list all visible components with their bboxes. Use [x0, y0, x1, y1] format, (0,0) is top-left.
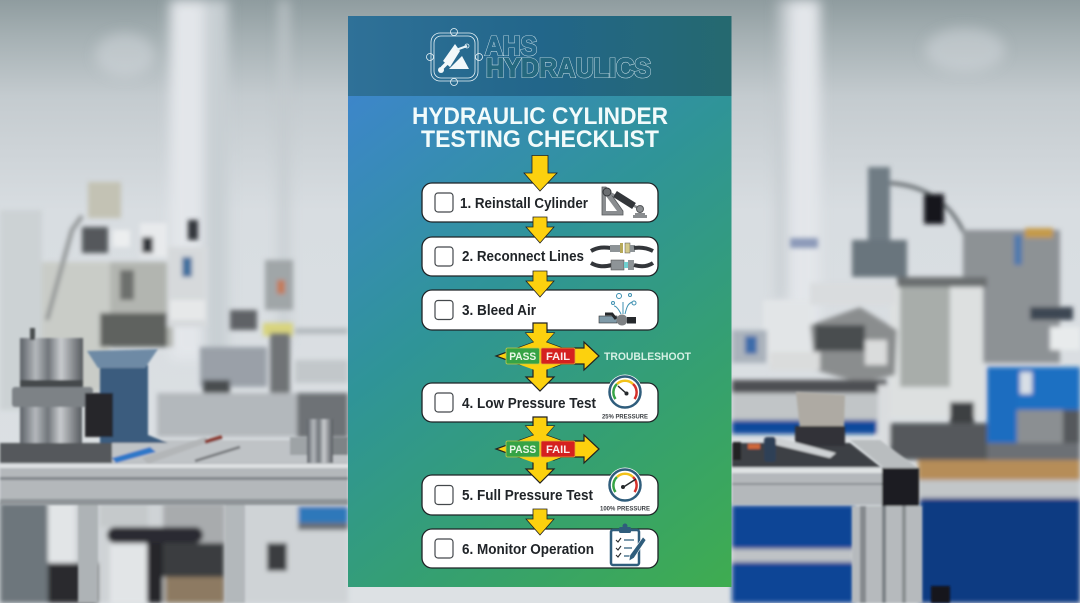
logo wordmark: AHS	[485, 31, 537, 61]
icon: bleeding air valve	[599, 294, 636, 326]
arrow: start	[524, 156, 557, 191]
step 3 card	[422, 290, 658, 330]
right table	[732, 443, 882, 468]
arrows at step 3 pass/fail decision	[496, 323, 599, 391]
step 4 card	[422, 374, 658, 422]
step 1 label: 1. Reinstall Cylinder	[460, 196, 588, 212]
checkbox	[435, 300, 453, 320]
step 6 label: 6. Monitor Operation	[462, 542, 594, 558]
step 4 pass badge: PASS	[509, 444, 536, 456]
step 4 fail badge	[541, 441, 575, 457]
step 4 pass badge	[506, 441, 540, 457]
tools on bench	[112, 447, 156, 463]
checkbox	[435, 393, 453, 412]
step 5 card	[422, 468, 658, 515]
step 1 card	[422, 183, 658, 222]
checkbox	[435, 486, 453, 504]
step 2 card	[422, 237, 658, 276]
step 4 fail badge: FAIL	[546, 444, 570, 456]
gauge caption 100 percent: 100% PRESSURE	[600, 506, 651, 512]
poster panel	[348, 16, 732, 587]
checkbox	[435, 539, 453, 558]
bench and cabinet right	[918, 460, 1080, 480]
steel cylinder part	[20, 338, 83, 380]
arrow: 2 to 3	[526, 271, 554, 297]
tools right	[796, 392, 845, 430]
arrow: 1 to 2	[526, 217, 554, 243]
title: HYDRAULIC CYLINDER	[412, 103, 668, 130]
step 3 pass badge: PASS	[509, 351, 536, 363]
blue vise	[100, 365, 168, 443]
icon: cylinder on mount	[602, 187, 647, 218]
logo wordmark: HYDRAULICS	[486, 53, 651, 83]
icon: gauge at 100 percent	[608, 468, 642, 502]
icon: gauge at 25 percent	[608, 374, 642, 410]
logo wordmark	[485, 31, 651, 83]
wall pillars	[170, 0, 204, 360]
below left table	[0, 503, 348, 603]
checkbox	[435, 193, 453, 212]
logo wordmark: HYDRAULICS	[486, 53, 651, 83]
checkbox	[435, 247, 453, 266]
right machinery	[868, 167, 890, 240]
step 6 card	[422, 524, 658, 568]
step 2 label: 2. Reconnect Lines	[462, 249, 584, 265]
step 3 pass badge	[506, 348, 540, 364]
icon: hose couplings	[591, 243, 653, 270]
header band	[348, 16, 732, 96]
step 3 label: 3. Bleed Air	[462, 303, 536, 319]
step 4 label: 4. Low Pressure Test	[462, 396, 596, 412]
logo wordmark: AHS	[485, 31, 537, 61]
logo	[426, 28, 651, 86]
troubleshoot label: TROUBLESHOOT	[604, 351, 691, 363]
title	[412, 103, 668, 153]
logo emblem	[426, 28, 482, 86]
gauge caption 25 percent: 25% PRESSURE	[602, 414, 649, 420]
step 3 fail badge	[541, 348, 575, 364]
left machinery	[0, 210, 42, 410]
arrow: 5 to 6	[526, 509, 554, 535]
step 3 fail badge: FAIL	[546, 351, 570, 363]
icon: clipboard with pen	[611, 524, 646, 565]
arrows at step 4 pass/fail decision	[496, 417, 599, 483]
left table	[112, 440, 348, 464]
title: TESTING CHECKLIST	[421, 126, 659, 153]
step 5 label: 5. Full Pressure Test	[462, 488, 593, 504]
